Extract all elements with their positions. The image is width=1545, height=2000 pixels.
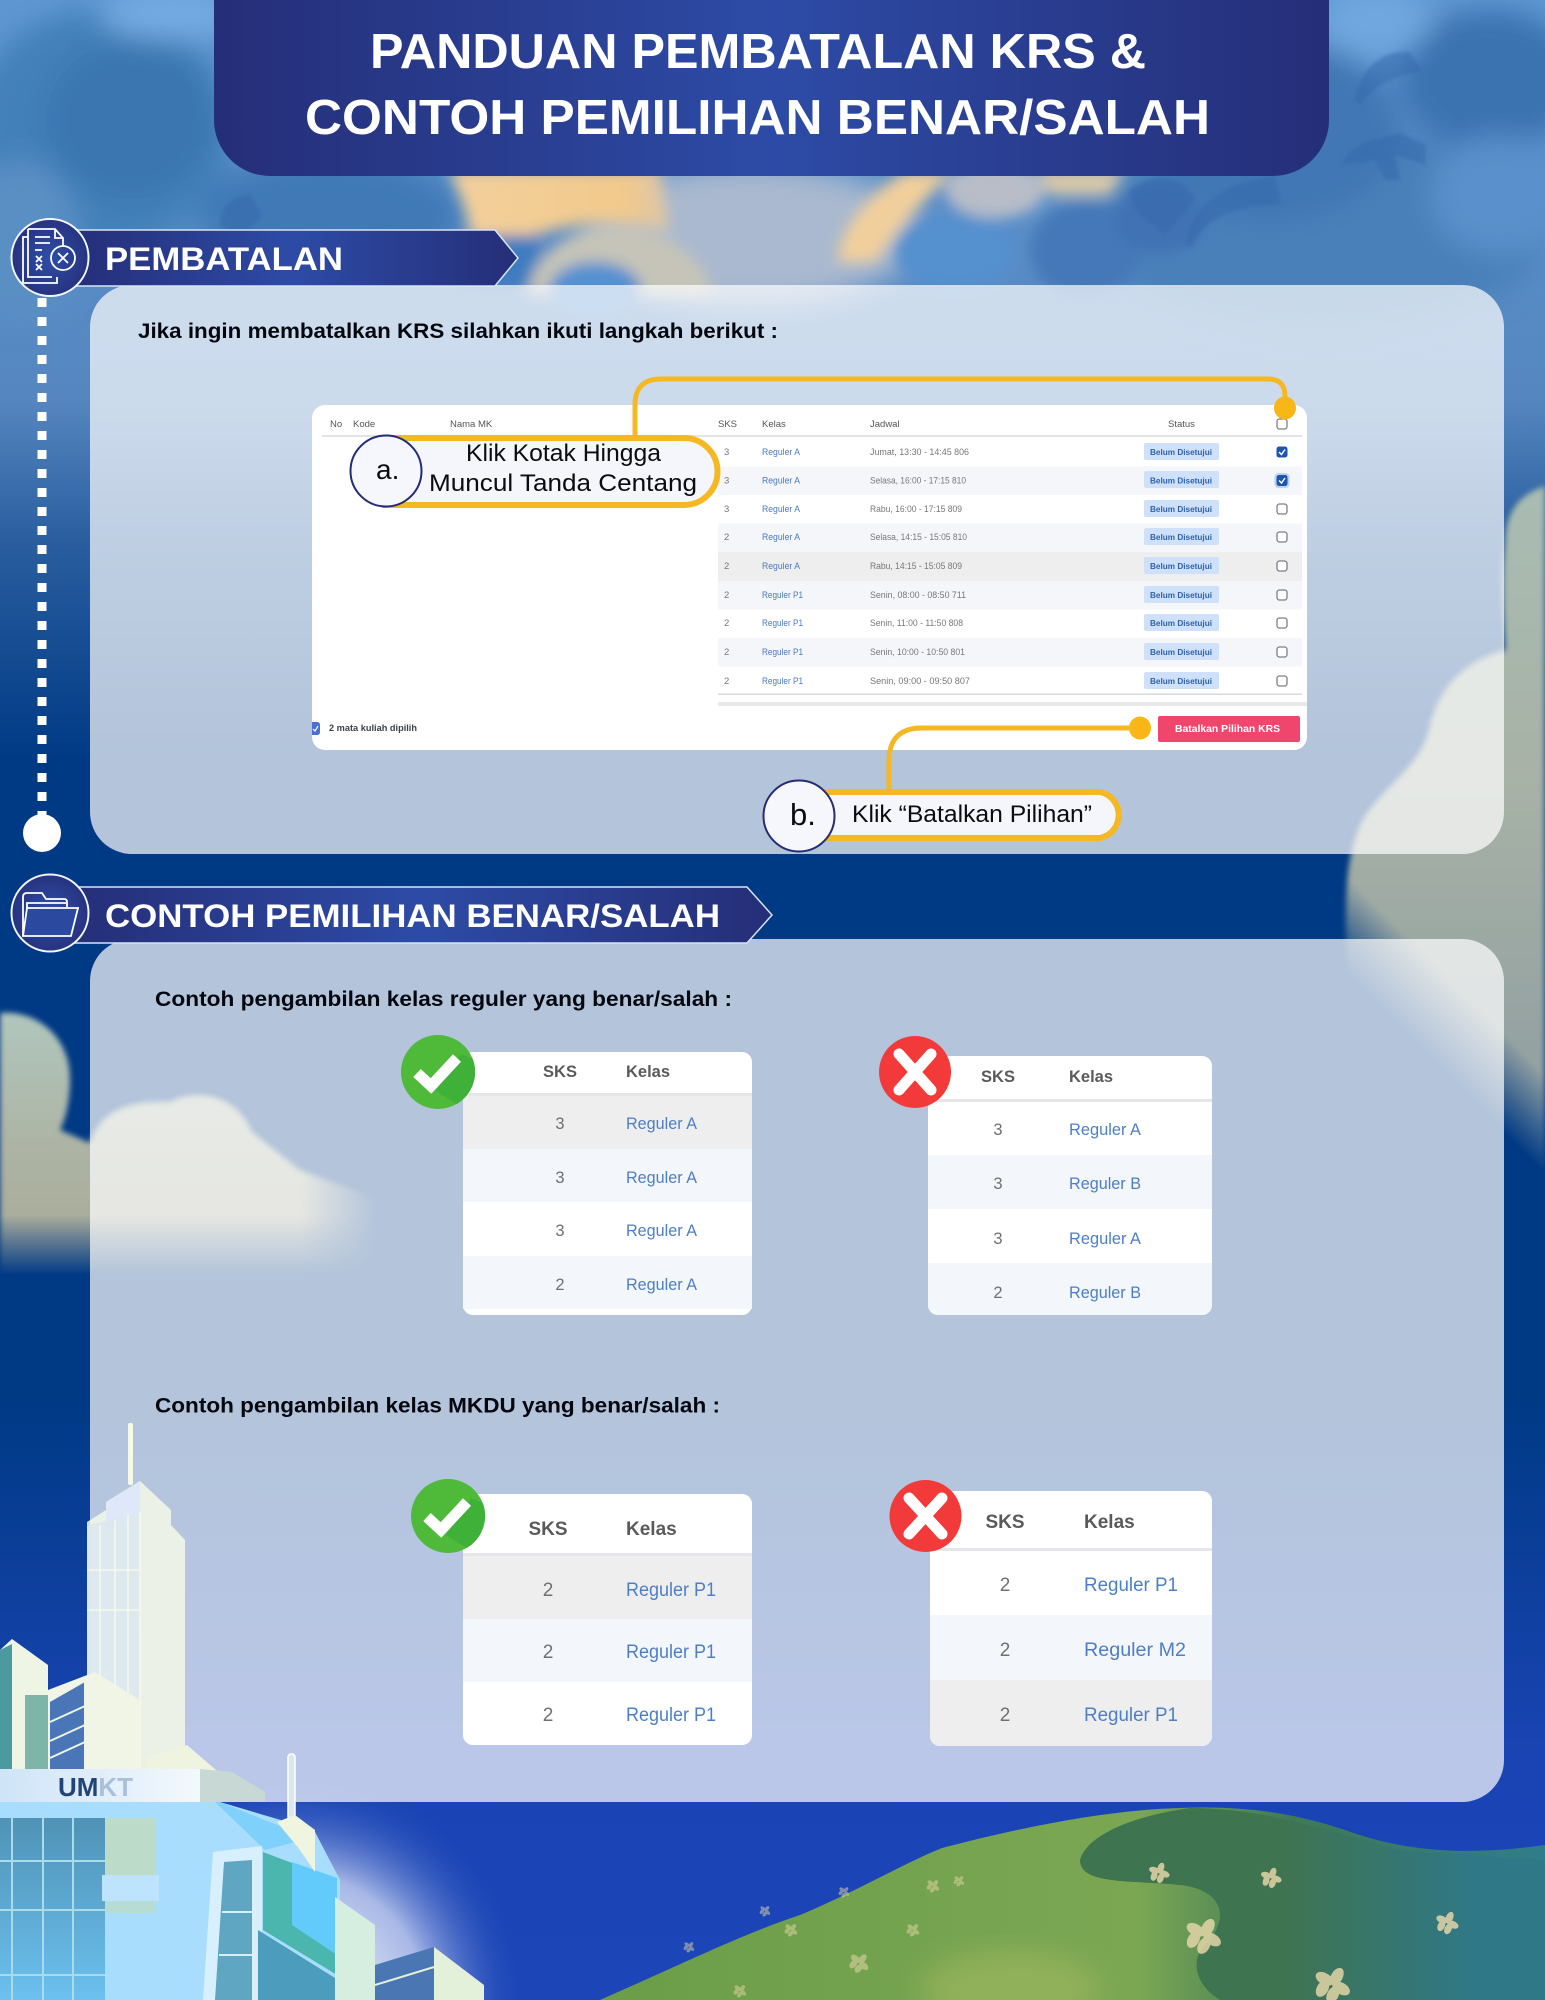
- table rows: status chips: Belum Disetujui: [1150, 618, 1212, 628]
- table rows: jadwal: Senin, 10:00 - 10:50 801: [870, 647, 965, 657]
- table: regular wrong: [928, 1056, 1212, 1315]
- panel: pembatalan background: [90, 285, 1504, 854]
- table: MKDU wrong: 2: [1000, 1640, 1010, 1661]
- table: regular wrong: 3: [993, 1175, 1003, 1193]
- table rows: kelas: Reguler P1: [762, 590, 803, 600]
- table: regular wrong: SKS: [981, 1068, 1015, 1086]
- table rows: jadwal: Selasa, 14:15 - 15:05 810: [870, 532, 967, 542]
- table: regular correct: Kelas: [626, 1063, 670, 1081]
- table: MKDU wrong: SKS: [985, 1512, 1025, 1533]
- table rows: status chips: Belum Disetujui: [1150, 476, 1212, 486]
- callout a: a.: [376, 454, 399, 485]
- table header labels: Jadwal: [870, 419, 900, 430]
- table rows: status chips: [1144, 443, 1219, 689]
- table rows: jadwal: Jumat, 13:30 - 14:45 806: [870, 447, 969, 457]
- table: regular wrong: Reguler A: [1069, 1230, 1141, 1248]
- arrow: connector from callout b to button: [889, 716, 1151, 792]
- right cloud: [1346, 486, 1545, 1200]
- table: regular wrong: Reguler A: [1069, 1121, 1141, 1139]
- table: MKDU wrong: Reguler P1: [1084, 1575, 1178, 1596]
- table: regular correct: SKS: [543, 1063, 577, 1081]
- table rows: sks: 3: [724, 504, 729, 515]
- section heading: pembatalan: [70, 230, 518, 286]
- table: MKDU correct: SKS: [528, 1519, 568, 1540]
- table rows: kelas: Reguler A: [762, 476, 800, 486]
- table rows: kelas: Reguler A: [762, 447, 800, 457]
- table: regular correct: Reguler A: [626, 1169, 697, 1187]
- table rows: sks: 2: [724, 532, 729, 543]
- table rows: jadwal: Senin, 09:00 - 09:50 807: [870, 676, 970, 686]
- table rows: sks: [724, 447, 729, 687]
- callout b: [764, 780, 1119, 852]
- cancel button: Batalkan Pilihan KRS: [1175, 723, 1280, 735]
- callout a: Muncul Tanda Centang: [429, 470, 697, 497]
- table rows: sks: 2: [724, 590, 729, 601]
- UMKT sign: UMKT: [58, 1772, 133, 1802]
- table: MKDU wrong: [930, 1491, 1212, 1746]
- table: regular wrong: Reguler B: [1069, 1175, 1141, 1193]
- icon: document with cross: [12, 219, 88, 296]
- table rows: jadwal: Senin, 08:00 - 08:50 711: [870, 590, 966, 600]
- table rows: kelas: [762, 447, 803, 686]
- table rows: kelas: Reguler A: [762, 532, 800, 542]
- table: MKDU wrong: Reguler M2: [1084, 1640, 1186, 1661]
- table: MKDU wrong: 2: [1000, 1705, 1010, 1726]
- table rows: jadwal: [870, 447, 970, 686]
- table rows: status chips: Belum Disetujui: [1150, 532, 1212, 542]
- table rows: status chips: Belum Disetujui: [1150, 647, 1212, 657]
- icon: folder: [12, 874, 88, 952]
- table: regular wrong: Reguler B: [1069, 1284, 1141, 1302]
- left cloud: [0, 1008, 365, 1272]
- callout b: Klik “Batalkan Pilihan”: [852, 801, 1092, 828]
- table header labels: Status: [1168, 419, 1195, 430]
- table: MKDU correct: Reguler P1: [626, 1642, 716, 1663]
- table: MKDU wrong: Kelas: [1084, 1512, 1135, 1533]
- table: MKDU wrong: 2: [1000, 1575, 1010, 1596]
- table rows: kelas: Reguler P1: [762, 618, 803, 628]
- table rows: sks: 2: [724, 647, 729, 658]
- table rows: sks: 2: [724, 561, 729, 572]
- table: regular correct: 2: [555, 1276, 565, 1294]
- table: MKDU wrong: Reguler P1: [1084, 1705, 1178, 1726]
- table: regular wrong: Kelas: [1069, 1068, 1113, 1086]
- selected count footer: 2 mata kuliah dipilih: [329, 723, 417, 734]
- title text: PANDUAN PEMBATALAN KRS &: [370, 25, 1146, 79]
- screenshot: KRS table: [312, 405, 1307, 750]
- table rows: jadwal: Rabu, 16:00 - 17:15 809: [870, 504, 962, 514]
- cancel button: [1158, 716, 1300, 742]
- table: MKDU correct: [463, 1494, 752, 1745]
- table: MKDU correct: Reguler P1: [626, 1705, 716, 1726]
- table rows: jadwal: Rabu, 14:15 - 15:05 809: [870, 561, 962, 571]
- table: MKDU correct: Reguler P1: [626, 1580, 716, 1601]
- table rows: sks: 3: [724, 476, 729, 486]
- title banner: [214, 0, 1329, 176]
- table header labels: No: [330, 419, 342, 430]
- table rows: kelas: Reguler P1: [762, 676, 803, 686]
- dotted vertical connector: [23, 298, 61, 852]
- table header labels: SKS: [718, 419, 737, 430]
- table: regular correct: 3: [555, 1222, 565, 1240]
- cloud swirls top right: [220, 52, 1426, 247]
- table rows: status chips: Belum Disetujui: [1150, 590, 1212, 600]
- panel: contoh background: [90, 939, 1504, 1802]
- section heading: pembatalan: PEMBATALAN: [105, 241, 343, 277]
- table rows: jadwal: Senin, 11:00 - 11:50 808: [870, 618, 963, 628]
- table: regular wrong: 3: [993, 1121, 1003, 1139]
- table rows: kelas: Reguler A: [762, 504, 800, 514]
- table rows: sks: 3: [724, 447, 729, 458]
- table rows: status chips: Belum Disetujui: [1150, 561, 1212, 571]
- section heading: contoh: [70, 887, 772, 943]
- illustration: campus buildings: [0, 1423, 484, 2000]
- icon: red cross: [879, 1036, 951, 1108]
- table: regular correct: Reguler A: [626, 1115, 697, 1133]
- callout a: Klik Kotak Hingga: [466, 440, 662, 467]
- table: MKDU correct: Kelas: [626, 1519, 677, 1540]
- table header labels: Kelas: [762, 419, 786, 430]
- table rows: sks: 2: [724, 676, 729, 687]
- green hill with flowers: [600, 1807, 1545, 2000]
- icon: green check: [411, 1479, 485, 1553]
- selected count footer: [312, 722, 417, 735]
- table header labels: Nama MK: [450, 419, 493, 430]
- panel instruction text: Jika ingin membatalkan KRS silahkan ikuti langkah berikut :: [138, 319, 778, 343]
- table: regular wrong: 3: [993, 1230, 1003, 1248]
- table: MKDU correct: 2: [543, 1642, 553, 1663]
- table header labels: [330, 419, 1195, 430]
- title text: CONTOH PEMILIHAN BENAR/SALAH: [305, 91, 1210, 145]
- icon: green check: [401, 1035, 475, 1109]
- table: regular correct: 3: [555, 1115, 565, 1133]
- table header labels: Kode: [353, 419, 375, 430]
- table rows: checkboxes: [1274, 419, 1290, 686]
- table rows: status chips: Belum Disetujui: [1150, 447, 1212, 457]
- table: regular correct: Reguler A: [626, 1276, 697, 1294]
- callout b: b.: [790, 797, 816, 832]
- table rows: kelas: Reguler P1: [762, 647, 803, 657]
- callout a: [350, 436, 718, 506]
- table: MKDU correct: 2: [543, 1580, 553, 1601]
- table: regular correct: [463, 1052, 752, 1315]
- arrow: connector from callout a to checkbox: [635, 379, 1296, 438]
- heading: regular class examples: Contoh pengambilan kelas reguler yang benar/salah :: [155, 988, 732, 1011]
- table: regular correct: 3: [555, 1169, 565, 1187]
- light glow behind building: [0, 1760, 540, 2000]
- table rows: status chips: Belum Disetujui: [1150, 676, 1212, 686]
- heading: MKDU class examples: Contoh pengambilan kelas MKDU yang benar/salah :: [155, 1394, 720, 1418]
- icon: red cross: [890, 1480, 962, 1552]
- table rows: kelas: Reguler A: [762, 561, 800, 571]
- table: MKDU correct: 2: [543, 1705, 553, 1726]
- table rows: status chips: Belum Disetujui: [1150, 504, 1212, 514]
- table rows: jadwal: Selasa, 16:00 - 17:15 810: [870, 476, 966, 486]
- table: regular wrong: 2: [993, 1284, 1003, 1302]
- table: regular correct: Reguler A: [626, 1222, 697, 1240]
- peach clouds: [449, 162, 1205, 318]
- table rows: sks: 2: [724, 618, 729, 629]
- section heading: contoh: CONTOH PEMILIHAN BENAR/SALAH: [105, 898, 720, 934]
- blue clouds at top: [0, 0, 1545, 330]
